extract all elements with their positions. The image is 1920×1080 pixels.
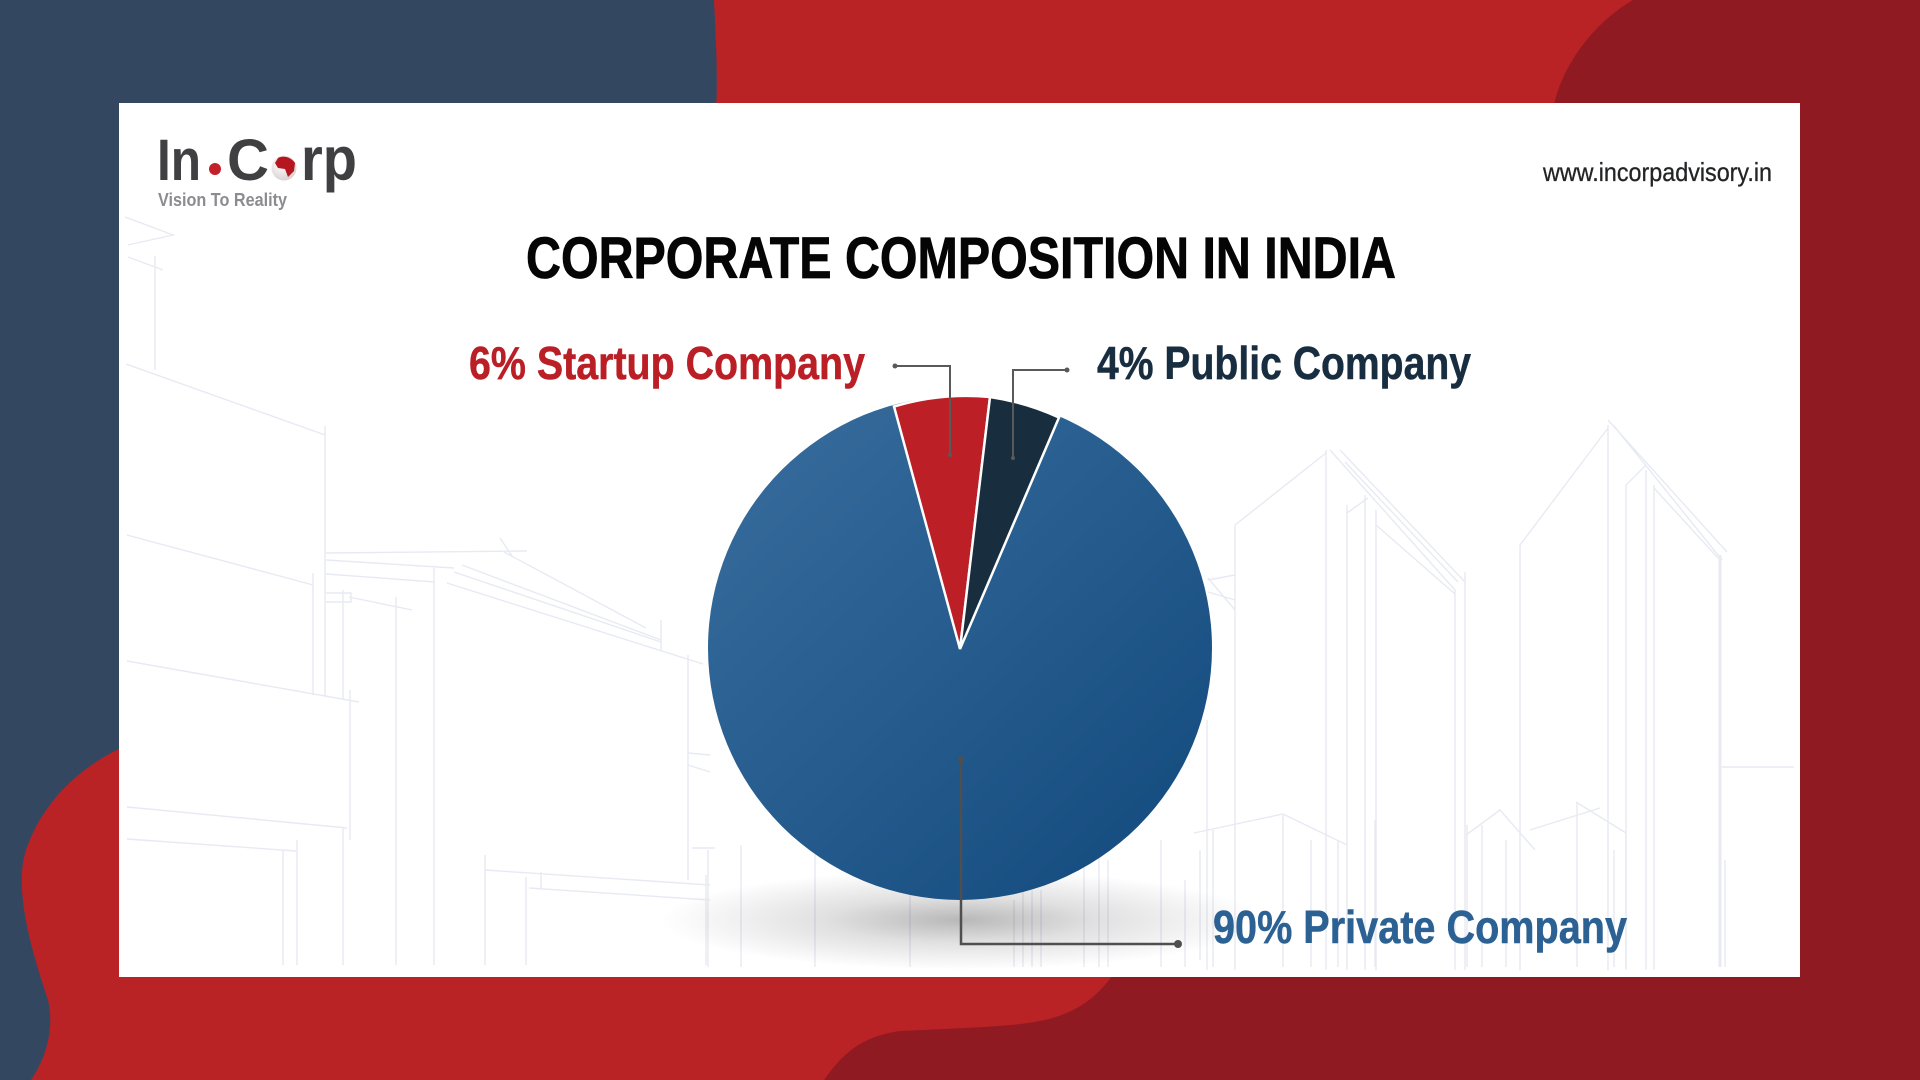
background: dark red shape <box>824 0 1920 1080</box>
logo wordmark: rp: rp <box>301 125 357 193</box>
building sketch background <box>125 217 1794 970</box>
slice: 4% public company <box>960 397 1059 649</box>
logo red dot <box>209 163 221 175</box>
title: CORPORATE COMPOSITION IN INDIA <box>526 226 1396 291</box>
logo <box>157 125 357 210</box>
background: navy shape <box>0 0 717 1080</box>
leader line: private <box>958 756 1182 948</box>
pie shadow <box>660 870 1260 970</box>
logo wordmark: In: In <box>157 128 201 193</box>
website url: www.incorpadvisory.in <box>1542 157 1772 187</box>
leader line: public <box>1011 368 1070 460</box>
slice: 90% private company <box>708 396 1212 900</box>
label: 6% startup company: 6% Startup Company <box>469 337 865 389</box>
panel: white card <box>119 103 1800 977</box>
pie chart <box>708 396 1212 900</box>
icon: globe <box>272 156 296 180</box>
leader line: startup <box>892 364 952 457</box>
logo tagline: Vision To Reality <box>158 190 287 210</box>
logo wordmark: C: C <box>227 128 269 193</box>
slice: 6% startup company <box>894 396 990 649</box>
label: 90% private company: 90% Private Company <box>1213 901 1627 953</box>
label: 4% public company: 4% Public Company <box>1097 337 1471 389</box>
